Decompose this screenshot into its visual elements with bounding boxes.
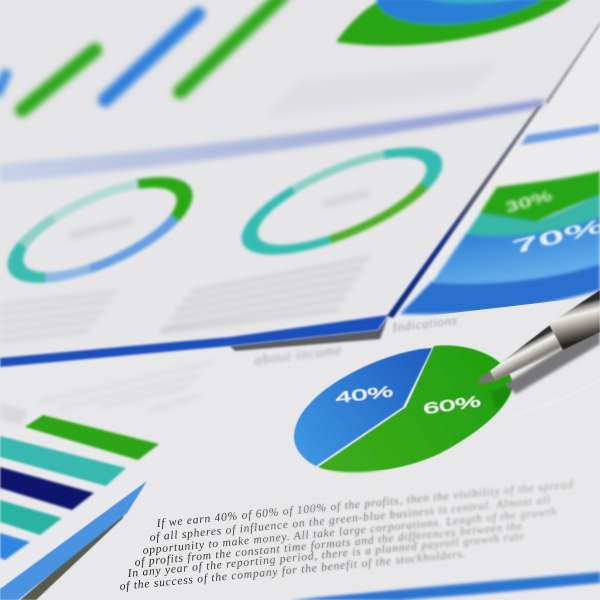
pen shadow: [505, 328, 600, 394]
text block: body paragraph: of the success of the company for the benefit of the stockholders.: [119, 547, 467, 593]
ring centre labels (out of focus): [68, 188, 370, 241]
pen tip: [478, 372, 495, 385]
heading: indications: Indications: [391, 312, 458, 335]
icon: ballpoint pen: [478, 290, 600, 394]
panel: main lower sheet: [0, 296, 600, 600]
faint text block: [262, 62, 500, 118]
faint text under fold: [40, 362, 215, 410]
bar: blue: [0, 533, 30, 560]
pie chart: 40% / 60%: [294, 345, 513, 472]
panel: right sheet with area chart: [390, 22, 600, 320]
text block: left column: [0, 292, 118, 341]
label: 40%: 40%: [334, 383, 394, 407]
pen shadow on pie: [490, 384, 513, 410]
label: 60%: 60%: [422, 393, 482, 418]
panel: lower-left sheet with horizontal bars: [0, 398, 165, 600]
bar: navy: [0, 467, 94, 510]
pen barrel: [549, 290, 600, 350]
text block: body paragraph: opportunity to make money. All take large corporations. Length of the growth: [142, 505, 558, 557]
label: 70%: 70%: [510, 215, 600, 259]
sheet edge: blue bottom edge of middle sheet: [0, 315, 388, 367]
pen cone: [490, 325, 563, 381]
blue fold band: [0, 481, 147, 600]
ring chart: left: [4, 174, 196, 286]
donut chart cut by the top edge: [336, 0, 572, 46]
text block: body paragraph: If we earn 40% of 60% of 100% of the profits, then the visibility of the spread: [155, 478, 574, 530]
blue header band: [521, 124, 600, 145]
bar: teal 2: [0, 500, 62, 535]
bar: green: [25, 415, 159, 460]
bar: teal: [0, 436, 126, 486]
heading: about income: about income: [254, 342, 343, 369]
panel: top sheet with bar chart: [0, 0, 600, 178]
sheet edge: diagonal dark fold: [387, 22, 600, 318]
ring chart: right: [239, 144, 445, 258]
panel: middle sheet with ring charts: [0, 99, 545, 358]
pale arc on paper: [510, 380, 600, 416]
text block: body paragraph: of all spheres of influence on the green-blue business is central. Almost all: [149, 493, 551, 544]
text block: body paragraph: of profits from the constant time formats and the differences between the: [134, 519, 524, 569]
text block: body paragraph: In any year of the reporting period, there is a planned payroll growth rate: [126, 529, 526, 580]
text block: right column: [160, 258, 370, 332]
text block: body paragraph: [119, 478, 574, 593]
bar label placeholder: [0, 402, 28, 425]
bar chart: blurred bars: [0, 0, 282, 110]
area chart: stacked bands: [400, 171, 600, 314]
label: 30%: 30%: [503, 187, 554, 217]
bottom blue band: [290, 572, 600, 600]
blue divider band on top sheet: [0, 99, 545, 183]
